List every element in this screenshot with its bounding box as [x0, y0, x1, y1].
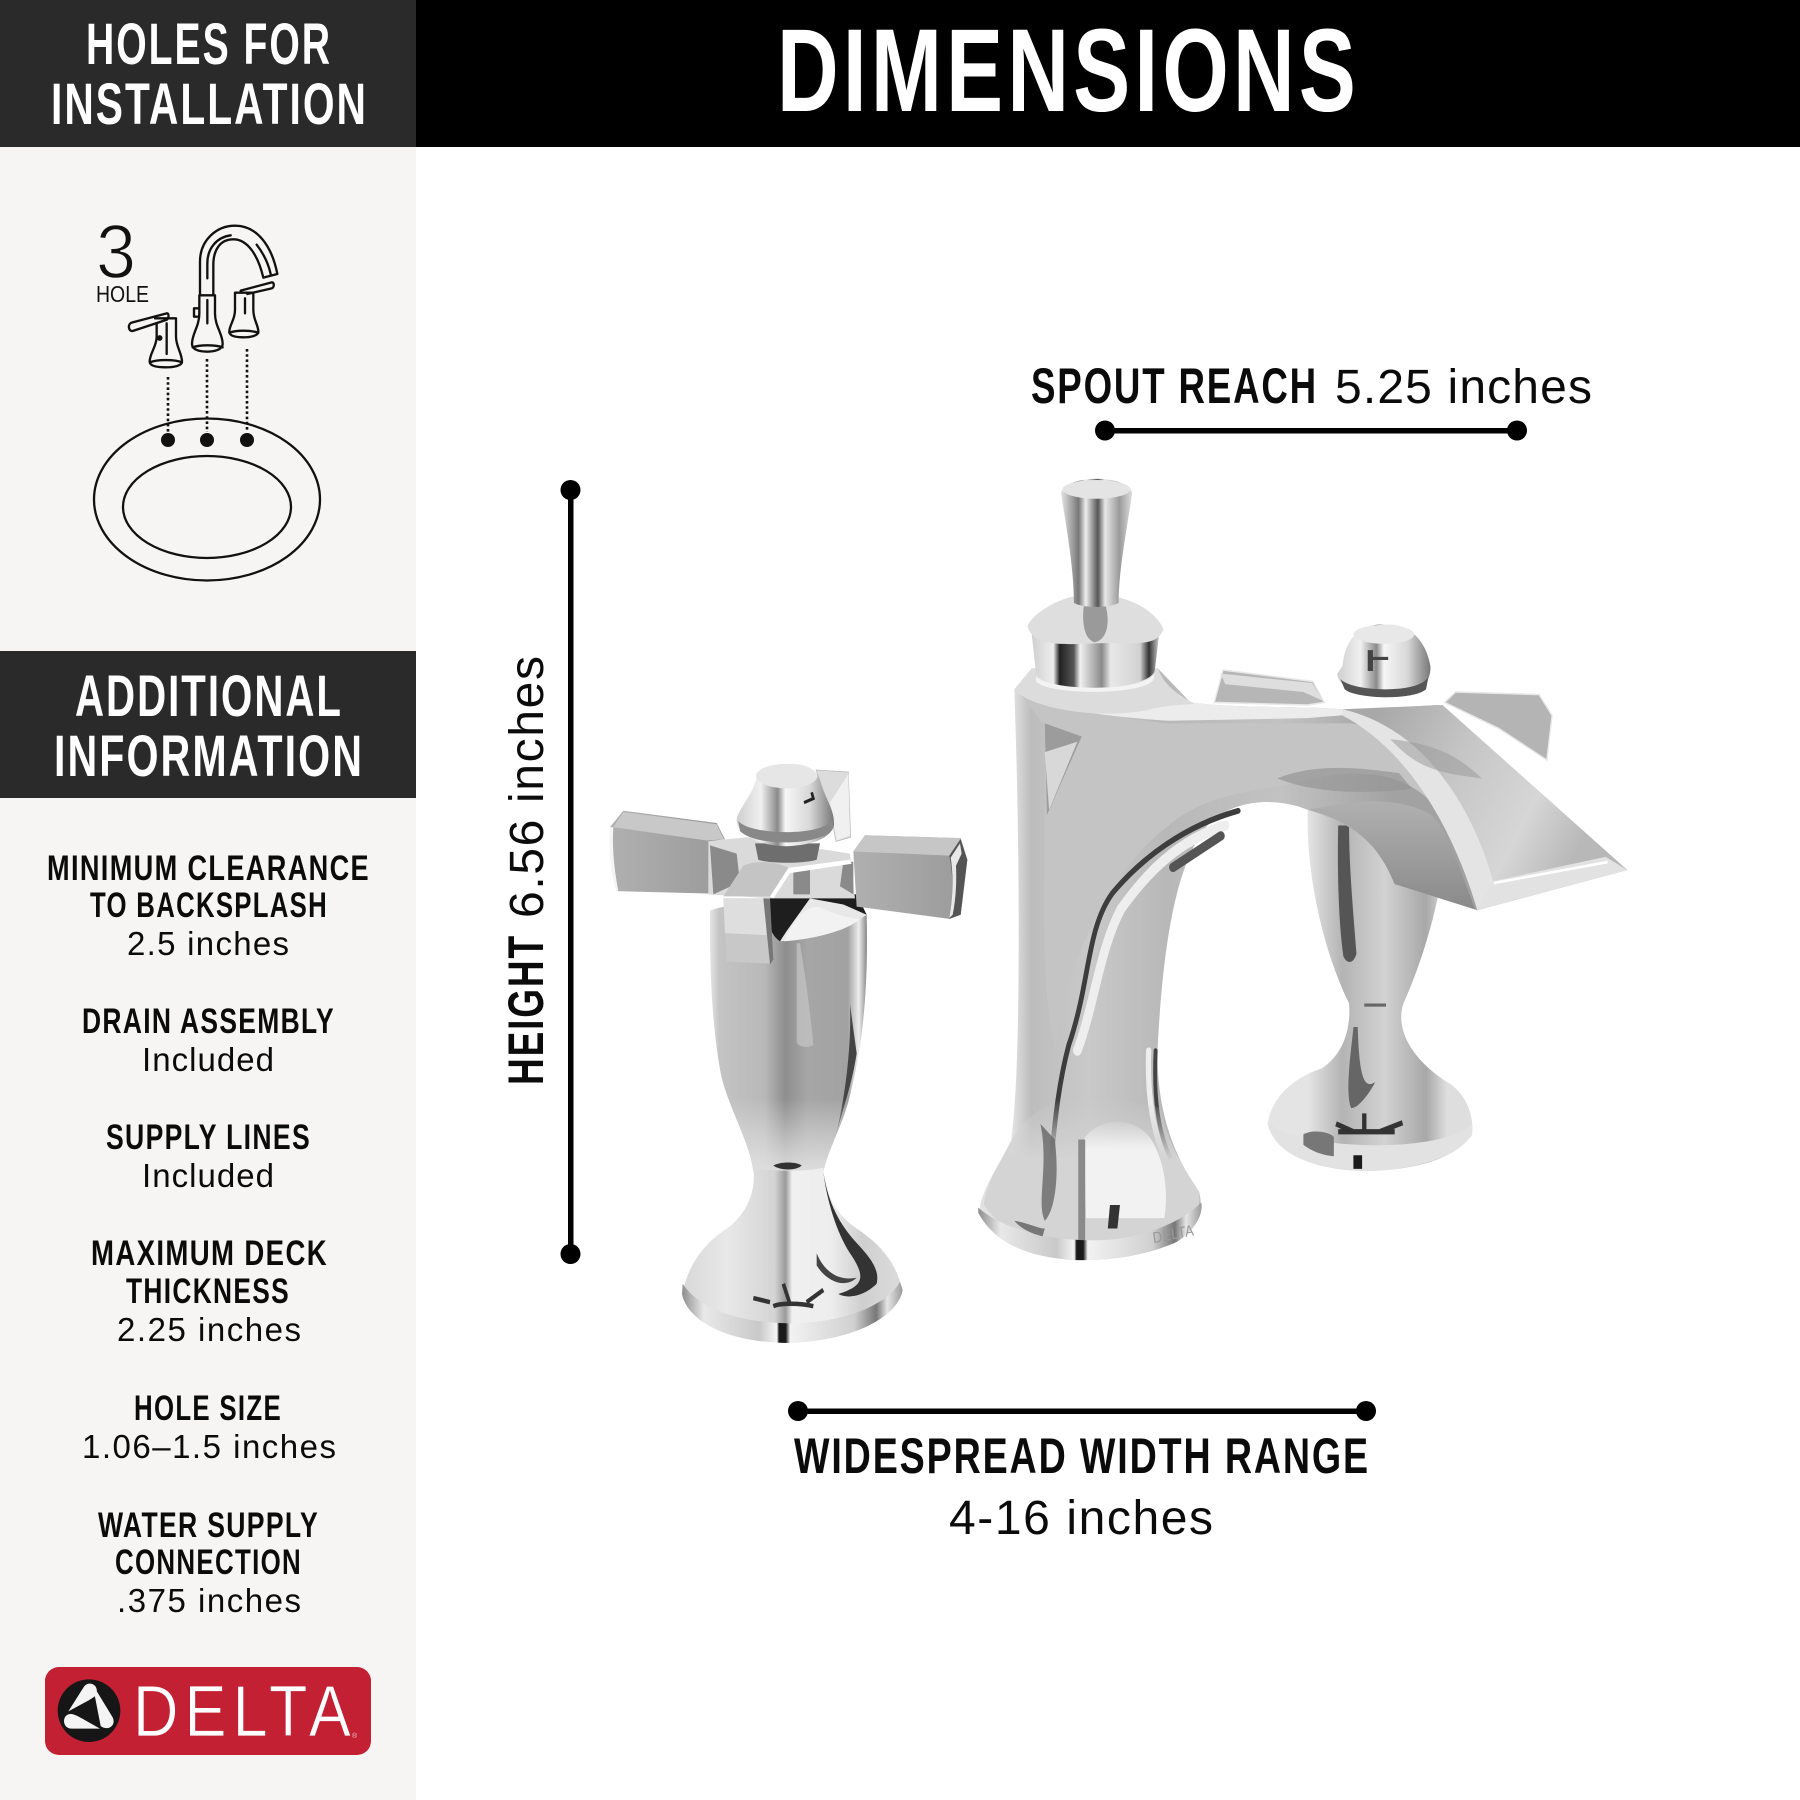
dimension: widespread width range — [788, 1401, 1376, 1545]
dimension: widespread width range: 4-16 inches — [949, 1492, 1213, 1545]
spec: drain assembly: DRAIN ASSEMBLY — [82, 1002, 335, 1041]
arrow: width line — [788, 1401, 1376, 1421]
heading: holes for installation — [0, 0, 416, 147]
title: DIMENSIONS — [777, 5, 1360, 137]
icon: basin — [94, 418, 320, 580]
heading: additional information: ADDITIONAL — [75, 664, 343, 729]
faucet: back cross handle and main spout — [978, 479, 1627, 1260]
spec: hole size: 1.06–1.5 inches — [82, 1428, 336, 1465]
handle spindle — [755, 843, 820, 863]
handle cap — [737, 764, 834, 846]
icon: three hole faucet and basin diagram — [94, 210, 320, 580]
spec list — [47, 849, 370, 1619]
icon: delta mark — [58, 1679, 120, 1742]
back handle cap — [1337, 624, 1430, 697]
icon: line art faucet — [129, 226, 277, 367]
logo: delta — [45, 1667, 371, 1755]
header: dimensions banner — [416, 0, 1800, 147]
arrow: height line — [560, 480, 580, 1264]
lift rod collar — [1014, 594, 1195, 714]
spec: water supply connection: CONNECTION — [115, 1543, 302, 1582]
back handle arms — [1214, 670, 1552, 760]
spec: drain assembly — [82, 1002, 335, 1078]
spec: drain assembly: Included — [142, 1041, 274, 1078]
dimension: widespread width range: WIDESPREAD WIDTH RANGE — [794, 1428, 1370, 1484]
heading: holes for installation: INSTALLATION — [51, 72, 368, 137]
spout base bell and rim: DELTA — [1152, 1222, 1195, 1248]
hole count label — [96, 210, 149, 307]
spec: water supply connection: .375 inches — [117, 1582, 301, 1619]
spec: maximum deck thickness — [91, 1234, 328, 1348]
spec: supply lines: Included — [142, 1157, 274, 1194]
handle arm back — [816, 770, 851, 841]
hole count label: HOLE — [96, 281, 149, 307]
handle arm front — [723, 898, 773, 964]
spec: supply lines: SUPPLY LINES — [106, 1118, 311, 1157]
spec: supply lines — [106, 1118, 311, 1194]
dimension: height: 6.56 inches — [501, 656, 554, 918]
handle arm left — [609, 811, 725, 894]
logo: delta: DELTA — [133, 1672, 357, 1752]
dimension: spout reach — [1031, 358, 1592, 440]
faucet: left cross handle — [609, 764, 967, 1343]
dotted guides — [168, 349, 247, 432]
heading: additional information: INFORMATION — [54, 724, 364, 789]
spout reflections — [1045, 811, 1238, 1213]
spout base bell and rim — [978, 1098, 1202, 1260]
spec: minimum clearance: MINIMUM CLEARANCE — [47, 849, 370, 888]
dimension: height — [498, 480, 580, 1264]
dimension: height: HEIGHT — [498, 934, 554, 1085]
heading: additional information — [0, 651, 416, 798]
dimension: spout reach: 5.25 inches — [1335, 361, 1592, 414]
lift rod — [1061, 479, 1132, 607]
spec: hole size: HOLE SIZE — [134, 1389, 282, 1428]
spec: minimum clearance: 2.5 inches — [127, 925, 289, 962]
handle body — [710, 902, 867, 1172]
spout main body — [980, 668, 1627, 1260]
spec: water supply connection — [98, 1506, 319, 1619]
arrow: spout reach line — [1095, 420, 1527, 440]
hole count label: 3 — [96, 210, 136, 295]
back handle body — [1268, 810, 1472, 1171]
spec: minimum clearance: TO BACKSPLASH — [90, 886, 328, 925]
handle arm right — [853, 835, 967, 919]
spec: water supply connection: WATER SUPPLY — [98, 1506, 319, 1545]
panel: sidebar background — [0, 0, 416, 1800]
spec: maximum deck thickness: THICKNESS — [126, 1272, 290, 1311]
dimension: spout reach: SPOUT REACH — [1031, 358, 1318, 414]
spec: maximum deck thickness: 2.25 inches — [117, 1311, 301, 1348]
spec: maximum deck thickness: MAXIMUM DECK — [91, 1234, 328, 1273]
logo: delta: ® — [352, 1732, 358, 1740]
handle hub opening — [707, 837, 867, 941]
heading: holes for installation: HOLES FOR — [86, 12, 332, 77]
spec: hole size — [82, 1389, 336, 1465]
handle bell and base — [682, 1162, 903, 1343]
spec: minimum clearance — [47, 849, 370, 962]
